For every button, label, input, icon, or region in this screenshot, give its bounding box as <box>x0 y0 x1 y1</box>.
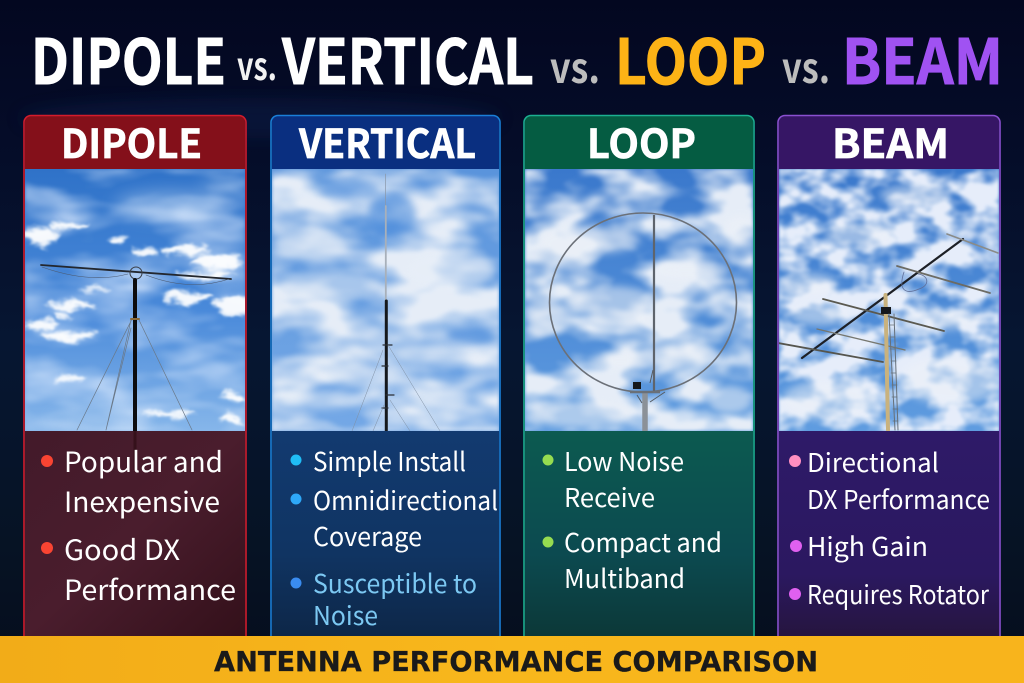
dipole benefits: Inexpensive <box>64 481 220 521</box>
title <box>31 12 1003 102</box>
title: vs. <box>237 36 277 91</box>
beam header: BEAM <box>832 112 949 170</box>
icon: loop antenna <box>550 213 736 431</box>
beam benefits: Requires Rotator <box>807 575 990 612</box>
vertical benefits <box>272 431 499 636</box>
panel: dipole <box>23 112 250 646</box>
loop benefits: Compact and <box>564 523 722 560</box>
footer banner: ANTENNA PERFORMANCE COMPARISON <box>214 645 818 678</box>
loop header: LOOP <box>587 112 696 170</box>
beam benefits: Directional <box>807 443 939 480</box>
icon: vertical antenna <box>352 174 440 431</box>
dipole benefits: Good DX <box>64 529 180 569</box>
vertical benefits: Noise <box>313 596 378 633</box>
title: BEAM <box>842 12 1003 102</box>
vertical benefits: Coverage <box>313 517 422 554</box>
panel: beam <box>778 112 1000 646</box>
icon: dipole antenna <box>41 265 231 431</box>
title: vs. <box>550 35 600 96</box>
beam benefits: High Gain <box>807 527 928 564</box>
dipole benefits: Popular and <box>64 441 223 481</box>
beam benefits <box>779 431 999 636</box>
loop header <box>525 112 753 170</box>
title: DIPOLE <box>31 12 226 102</box>
vertical benefits: Susceptible to <box>313 564 477 601</box>
vertical header: VERTICAL <box>298 112 476 170</box>
dipole header: DIPOLE <box>61 112 202 170</box>
icon: beam antenna <box>778 234 998 430</box>
vertical benefits: Omnidirectional <box>313 481 498 518</box>
dipole benefits <box>25 431 245 636</box>
title: vs. <box>782 35 830 96</box>
loop benefits <box>525 431 753 636</box>
loop benefits: Multiband <box>564 559 685 596</box>
dipole header <box>25 112 245 170</box>
beam header <box>779 112 999 170</box>
dipole benefits: Performance <box>64 569 236 609</box>
footer banner <box>0 636 1024 683</box>
loop benefits: Low Noise <box>564 442 684 479</box>
title: LOOP <box>615 12 766 102</box>
panel: loop <box>524 112 755 646</box>
vertical benefits: Simple Install <box>313 442 466 479</box>
beam benefits: DX Performance <box>807 480 990 517</box>
dipole photo <box>23 169 250 431</box>
panel: vertical <box>271 112 500 646</box>
loop photo <box>525 169 755 431</box>
vertical photo <box>272 169 499 431</box>
beam photo <box>779 169 1000 431</box>
title: VERTICAL <box>281 12 534 102</box>
loop benefits: Receive <box>564 478 655 515</box>
